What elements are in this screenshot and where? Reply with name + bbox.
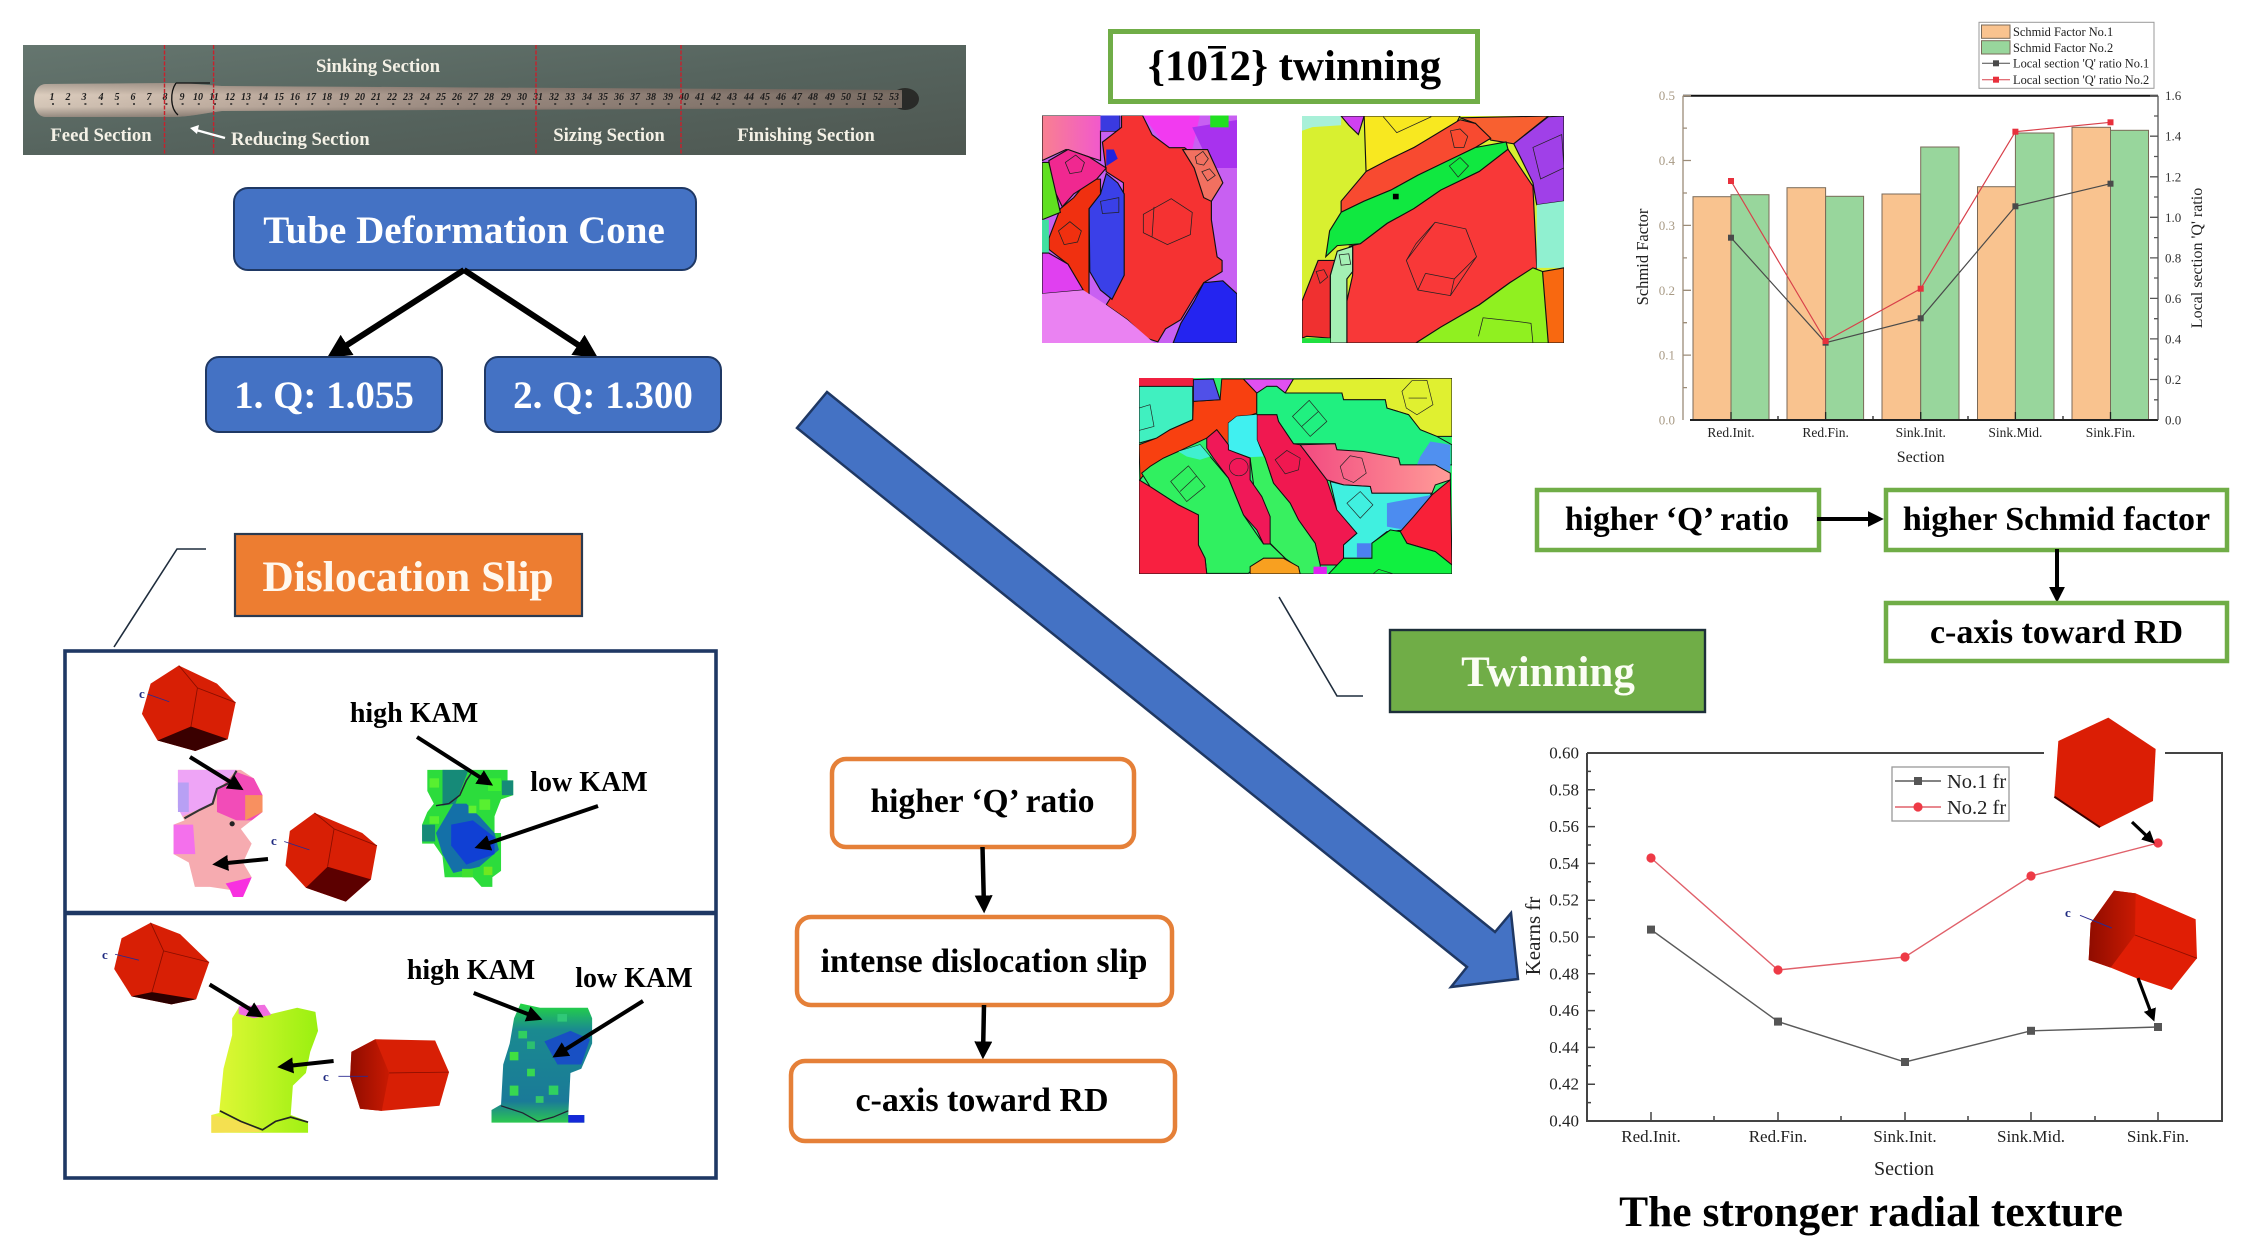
EBSD map: twinning right <box>1302 116 1564 343</box>
photo: tube deformation cone with sections: 34 <box>581 92 592 103</box>
right axis labels: 0.6 <box>2165 291 2182 306</box>
y axis labels: 0.58 <box>1549 780 1579 799</box>
flow box: c-axis toward RD (green): c-axis toward RD <box>1930 614 2183 651</box>
right axis title: Local section 'Q' ratio <box>2189 188 2206 328</box>
label: Dislocation Slip: Dislocation Slip <box>262 553 554 601</box>
y axis labels: 0.42 <box>1549 1075 1579 1094</box>
arrow: Q ratio to Schmid factor <box>1817 517 1879 521</box>
photo: tube deformation cone with sections: 22 <box>386 92 397 103</box>
line: No.2 fr <box>1646 838 2163 975</box>
photo: tube deformation cone with sections: 26 <box>451 92 462 103</box>
box: Q 1.300 <box>485 357 721 432</box>
panel: dislocation slip EBSD and KAM maps: c <box>271 833 277 848</box>
photo: tube deformation cone with sections: 42 <box>710 92 721 103</box>
y axis labels: 0.46 <box>1549 1001 1579 1020</box>
big diagonal blue arrow <box>797 392 1518 987</box>
y axis labels: 0.60 <box>1549 744 1579 762</box>
grain map: bottom yellow-green <box>211 1005 318 1133</box>
y axis labels <box>1549 744 1580 1130</box>
label: Twinning: Twinning <box>1461 649 1635 696</box>
flow box: higher Schmid factor: higher Schmid factor <box>1903 501 2210 538</box>
KAM map: top <box>422 770 513 887</box>
photo: tube deformation cone with sections: 45 <box>759 92 770 103</box>
right axis labels: 0.8 <box>2165 250 2181 265</box>
photo: tube deformation cone with sections: 19 <box>339 92 349 103</box>
photo: tube deformation cone with sections: 7 <box>146 92 152 103</box>
photo: tube deformation cone with sections: 20 <box>354 92 365 103</box>
flow box: higher Schmid factor <box>1886 490 2227 550</box>
leader line: dislocation slip label <box>114 549 206 647</box>
photo: tube deformation cone with sections: 16 <box>290 92 300 103</box>
right axis labels <box>2165 88 2182 427</box>
legend: Schmid Factor No.1 <box>2013 25 2113 39</box>
pointer arrows <box>190 737 643 1067</box>
photo: tube deformation cone with sections: 23 <box>402 92 413 103</box>
arrow: cone to Q 1.055 <box>333 270 464 354</box>
axes <box>1683 96 2158 420</box>
flow box: c-axis toward RD (orange) <box>791 1061 1175 1141</box>
photo: tube deformation cone with sections: Feed Section <box>50 125 152 146</box>
photo: tube deformation cone with sections: 8 <box>162 92 168 103</box>
legend: Local section 'Q' ratio No.2 <box>2013 73 2149 87</box>
box: Q 1.300: 2. Q: 1.300 <box>513 374 693 417</box>
KAM map: bottom <box>492 1004 592 1123</box>
photo: tube deformation cone with sections: 35 <box>597 92 608 103</box>
y axis labels: 0.52 <box>1549 891 1579 910</box>
flow box: higher Q ratio (orange) <box>832 759 1134 847</box>
photo: tube deformation cone with sections: 41 <box>694 92 705 103</box>
flow box: intense dislocation slip <box>797 917 1172 1005</box>
crystal cube: bottom middle <box>338 1039 449 1111</box>
photo: tube deformation cone with sections: 30 <box>516 92 527 103</box>
x axis labels: Red.Fin. <box>1749 1127 1807 1146</box>
right axis labels: 0.4 <box>2165 331 2182 346</box>
photo: tube deformation cone with sections: 32 <box>548 92 559 103</box>
flow box: higher Q ratio (green) <box>1537 490 1819 550</box>
right axis labels: 1.2 <box>2165 169 2181 184</box>
photo: tube deformation cone with sections: 29 <box>500 92 511 103</box>
photo: tube deformation cone with sections: 15 <box>274 92 284 103</box>
photo: tube deformation cone with sections: Sizing Section <box>553 125 665 146</box>
label: Twinning <box>1390 630 1705 712</box>
photo: tube deformation cone with sections: Sinking Section <box>316 56 441 77</box>
flow box: c-axis toward RD (orange): c-axis toward RD <box>855 1082 1109 1119</box>
conclusion: stronger radial texture: The stronger radial texture <box>1619 1188 2123 1236</box>
left axis labels: 0.4 <box>1659 153 1676 168</box>
chart: Schmid factor and local Q ratio <box>1633 22 2206 466</box>
photo: tube deformation cone with sections: 5 <box>114 92 120 103</box>
y axis labels: 0.56 <box>1549 817 1579 836</box>
legend: No.1 fr <box>1947 771 2006 793</box>
arrow: cube to No.1 point <box>2138 978 2153 1018</box>
heading: twinning plane <box>1110 32 1478 102</box>
photo: tube deformation cone with sections: 12 <box>225 92 235 103</box>
right axis labels: 1.4 <box>2165 129 2182 144</box>
photo: tube deformation cone with sections: 44 <box>743 92 754 103</box>
legend <box>1979 22 2154 88</box>
photo: tube deformation cone with sections: 46 <box>775 92 786 103</box>
photo: tube deformation cone with sections: 33 <box>564 92 575 103</box>
photo: tube deformation cone with sections: 13 <box>241 92 251 103</box>
category labels: Sink.Mid. <box>1988 425 2042 440</box>
photo: tube deformation cone with sections: 52 <box>873 92 883 103</box>
photo: tube deformation cone with sections: 50 <box>841 92 851 103</box>
photo: tube deformation cone with sections: Finishing Section <box>737 125 875 146</box>
legend: No.2 fr <box>1947 797 2006 819</box>
panel: dislocation slip EBSD and KAM maps: c <box>323 1069 329 1084</box>
photo: tube deformation cone with sections: 38 <box>645 92 656 103</box>
photo: tube deformation cone with sections: 28 <box>483 92 494 103</box>
photo: tube deformation cone with sections: 53 <box>889 92 899 103</box>
crystal cube: bottom left <box>114 923 209 1004</box>
photo: tube deformation cone with sections: 37 <box>629 92 641 103</box>
photo: tube deformation cone with sections: 43 <box>726 92 737 103</box>
photo: tube deformation cone with sections: 51 <box>857 92 867 103</box>
label: Dislocation Slip <box>235 534 582 616</box>
photo: tube deformation cone with sections: 36 <box>613 92 624 103</box>
category labels <box>1707 425 2135 440</box>
photo: tube deformation cone with sections: 39 <box>662 92 673 103</box>
flow box: c-axis toward RD (green) <box>1886 603 2227 661</box>
left axis labels <box>1659 88 1676 427</box>
crystal cube: top left <box>142 666 236 751</box>
line: Q ratio No.2 <box>1728 119 2114 344</box>
right axis labels: 1.6 <box>2165 88 2182 103</box>
label: high KAM bottom: high KAM <box>407 955 535 986</box>
box: Tube Deformation Cone: Tube Deformation Cone <box>263 209 665 252</box>
label: c axis: c <box>2065 905 2071 920</box>
right axis labels: 0.2 <box>2165 372 2181 387</box>
EBSD map: twinning left <box>1042 116 1237 343</box>
y axis title: Kearns fr <box>1521 897 1545 975</box>
label: high KAM top: high KAM <box>350 698 478 729</box>
left axis labels: 0.1 <box>1659 348 1675 363</box>
flow box: intense dislocation slip: intense dislocation slip <box>821 943 1147 980</box>
crystal cube: lower <box>2080 891 2197 990</box>
photo: tube deformation cone with sections: 21 <box>370 92 381 103</box>
right axis labels: 1.0 <box>2165 210 2181 225</box>
photo: tube deformation cone with sections: 49 <box>824 92 835 103</box>
x axis title: Section <box>1897 449 1945 466</box>
flow box: higher Q ratio (orange): higher ‘Q’ ratio <box>871 783 1094 820</box>
arrow: Schmid factor to c-axis <box>2055 549 2059 598</box>
photo: tube deformation cone with sections: 1 <box>50 92 54 103</box>
panel: dislocation slip EBSD and KAM maps: c <box>139 686 145 701</box>
photo: tube deformation cone with sections: 17 <box>306 92 317 103</box>
box: Tube Deformation Cone <box>234 188 696 270</box>
photo: tube deformation cone with sections: 9 <box>180 92 184 103</box>
x axis labels: Sink.Init. <box>1873 1127 1937 1146</box>
y axis labels: 0.50 <box>1549 928 1579 946</box>
left axis labels: 0.3 <box>1659 218 1675 233</box>
crystal cube: upper <box>2054 718 2156 827</box>
x axis labels <box>1621 1127 2189 1146</box>
grain map: top pink <box>174 770 263 897</box>
arrow: slip to c-axis <box>983 1005 984 1054</box>
left axis labels: 0.2 <box>1659 283 1675 298</box>
category labels: Sink.Fin. <box>2086 425 2135 440</box>
y axis labels: 0.48 <box>1549 964 1579 983</box>
category labels: Sink.Init. <box>1896 425 1946 440</box>
x axis title: Section <box>1874 1158 1934 1180</box>
category labels: Red.Init. <box>1707 425 1755 440</box>
photo: tube deformation cone with sections: 11 <box>209 92 219 103</box>
photo: tube deformation cone with sections: 6 <box>130 92 136 103</box>
right axis labels: 0.0 <box>2165 412 2181 428</box>
EBSD map: twinning bottom <box>1139 378 1452 574</box>
arrow: ratio to slip <box>982 847 984 908</box>
arrow: cone to Q 1.300 <box>464 270 592 354</box>
category labels: Red.Fin. <box>1802 425 1849 440</box>
crystal cube: top middle <box>284 813 377 902</box>
photo: tube deformation cone with sections: 14 <box>258 92 268 103</box>
photo: tube deformation cone with sections: 31 <box>532 92 543 103</box>
legend: Schmid Factor No.2 <box>2013 41 2113 55</box>
axes <box>1587 753 2222 1121</box>
legend <box>1892 767 2009 821</box>
photo: tube deformation cone with sections <box>23 45 966 155</box>
photo: tube deformation cone with sections: 4 <box>98 92 104 103</box>
left axis labels: 0.0 <box>1659 412 1675 428</box>
photo: tube deformation cone with sections: 25 <box>435 92 446 103</box>
photo: tube deformation cone with sections: Reducing Section <box>231 129 370 150</box>
panel: dislocation slip EBSD and KAM maps: c <box>102 947 108 962</box>
box: Q 1.055: 1. Q: 1.055 <box>234 374 414 417</box>
photo: tube deformation cone with sections: 47 <box>791 92 803 103</box>
photo: tube deformation cone with sections: 40 <box>678 92 689 103</box>
legend: Local section 'Q' ratio No.1 <box>2013 56 2149 70</box>
bars: Schmid factor by section <box>1693 127 2148 420</box>
panel: dislocation slip EBSD and KAM maps <box>65 651 716 1178</box>
y axis labels: 0.54 <box>1549 854 1580 873</box>
left axis title: Schmid Factor <box>1633 208 1652 305</box>
label: low KAM bottom: low KAM <box>575 963 693 994</box>
line: No.1 fr <box>1647 926 2162 1066</box>
heading: twinning plane: {1012} twinning <box>1148 43 1442 90</box>
y axis labels: 0.40 <box>1549 1112 1579 1130</box>
y axis labels: 0.44 <box>1549 1038 1580 1057</box>
chart: Kearns factor by section <box>1521 718 2222 1180</box>
arrow: cube to No.2 point <box>2132 822 2152 841</box>
x axis labels: Red.Init. <box>1621 1127 1681 1146</box>
line: Q ratio No.1 <box>1728 181 2114 346</box>
left axis labels: 0.5 <box>1659 88 1675 103</box>
photo: tube deformation cone with sections: 18 <box>322 92 332 103</box>
box: Q 1.055 <box>206 357 442 432</box>
label: low KAM top: low KAM <box>530 767 648 798</box>
flow box: higher Q ratio (green): higher ‘Q’ ratio <box>1565 501 1789 538</box>
photo: tube deformation cone with sections: 10 <box>193 92 203 103</box>
photo: tube deformation cone with sections: 27 <box>467 92 479 103</box>
photo: tube deformation cone with sections: 3 <box>80 92 86 103</box>
leader line: twinning label <box>1279 597 1363 696</box>
x axis labels: Sink.Mid. <box>1997 1127 2065 1146</box>
photo: tube deformation cone with sections: 24 <box>419 92 430 103</box>
x axis labels: Sink.Fin. <box>2127 1127 2189 1146</box>
photo: tube deformation cone with sections: 48 <box>807 92 818 103</box>
photo: tube deformation cone with sections: 2 <box>64 92 70 103</box>
